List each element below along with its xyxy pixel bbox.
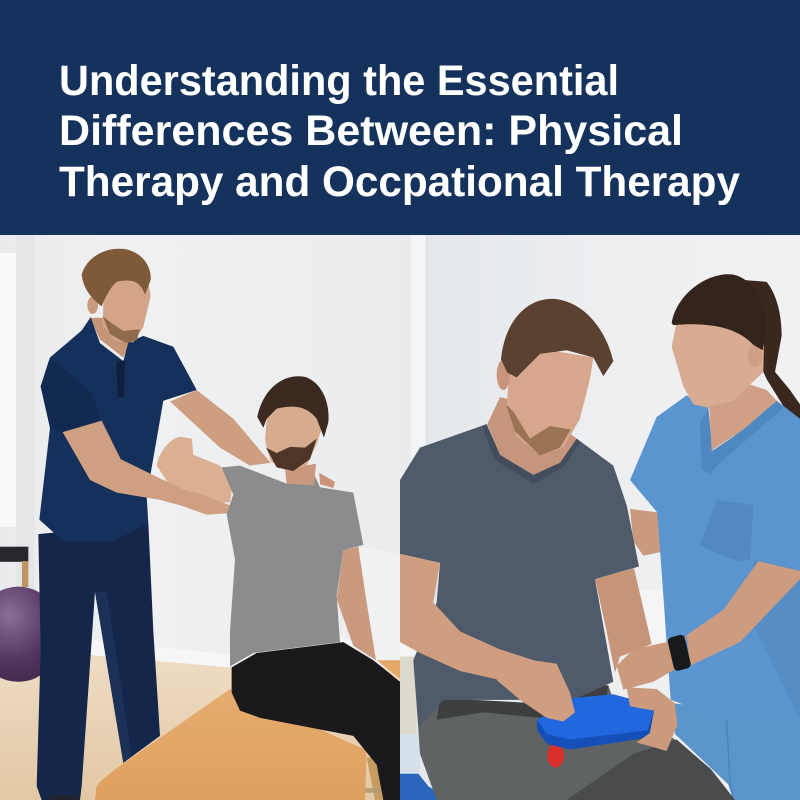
therapist in navy polo bbox=[37, 249, 271, 800]
therapist in blue scrubs bbox=[617, 274, 800, 800]
photo: occupational therapy session bbox=[400, 235, 800, 800]
title banner bbox=[0, 0, 800, 235]
patient seated bbox=[222, 376, 400, 800]
therapist supporting hand bbox=[180, 489, 230, 515]
patient hands bbox=[497, 649, 677, 751]
patient in slate t-shirt bbox=[400, 299, 735, 800]
treatment bench bbox=[95, 660, 400, 800]
smartwatch bbox=[667, 634, 692, 672]
patient raised arm bbox=[157, 437, 233, 502]
icon: purple exercise ball bbox=[0, 587, 62, 682]
blue plinth bbox=[400, 734, 450, 800]
title text: Differences Between: Physical bbox=[59, 107, 683, 155]
title text bbox=[59, 57, 740, 206]
title text: Understanding the Essential bbox=[59, 57, 619, 105]
blue therapy block bbox=[537, 694, 655, 768]
therapist head bbox=[672, 274, 767, 407]
patient head bbox=[487, 299, 613, 475]
title text: Therapy and Occpational Therapy bbox=[59, 158, 740, 206]
therapist head bbox=[82, 249, 151, 343]
photo: physical therapy session bbox=[0, 235, 400, 800]
patient head bbox=[257, 376, 329, 471]
